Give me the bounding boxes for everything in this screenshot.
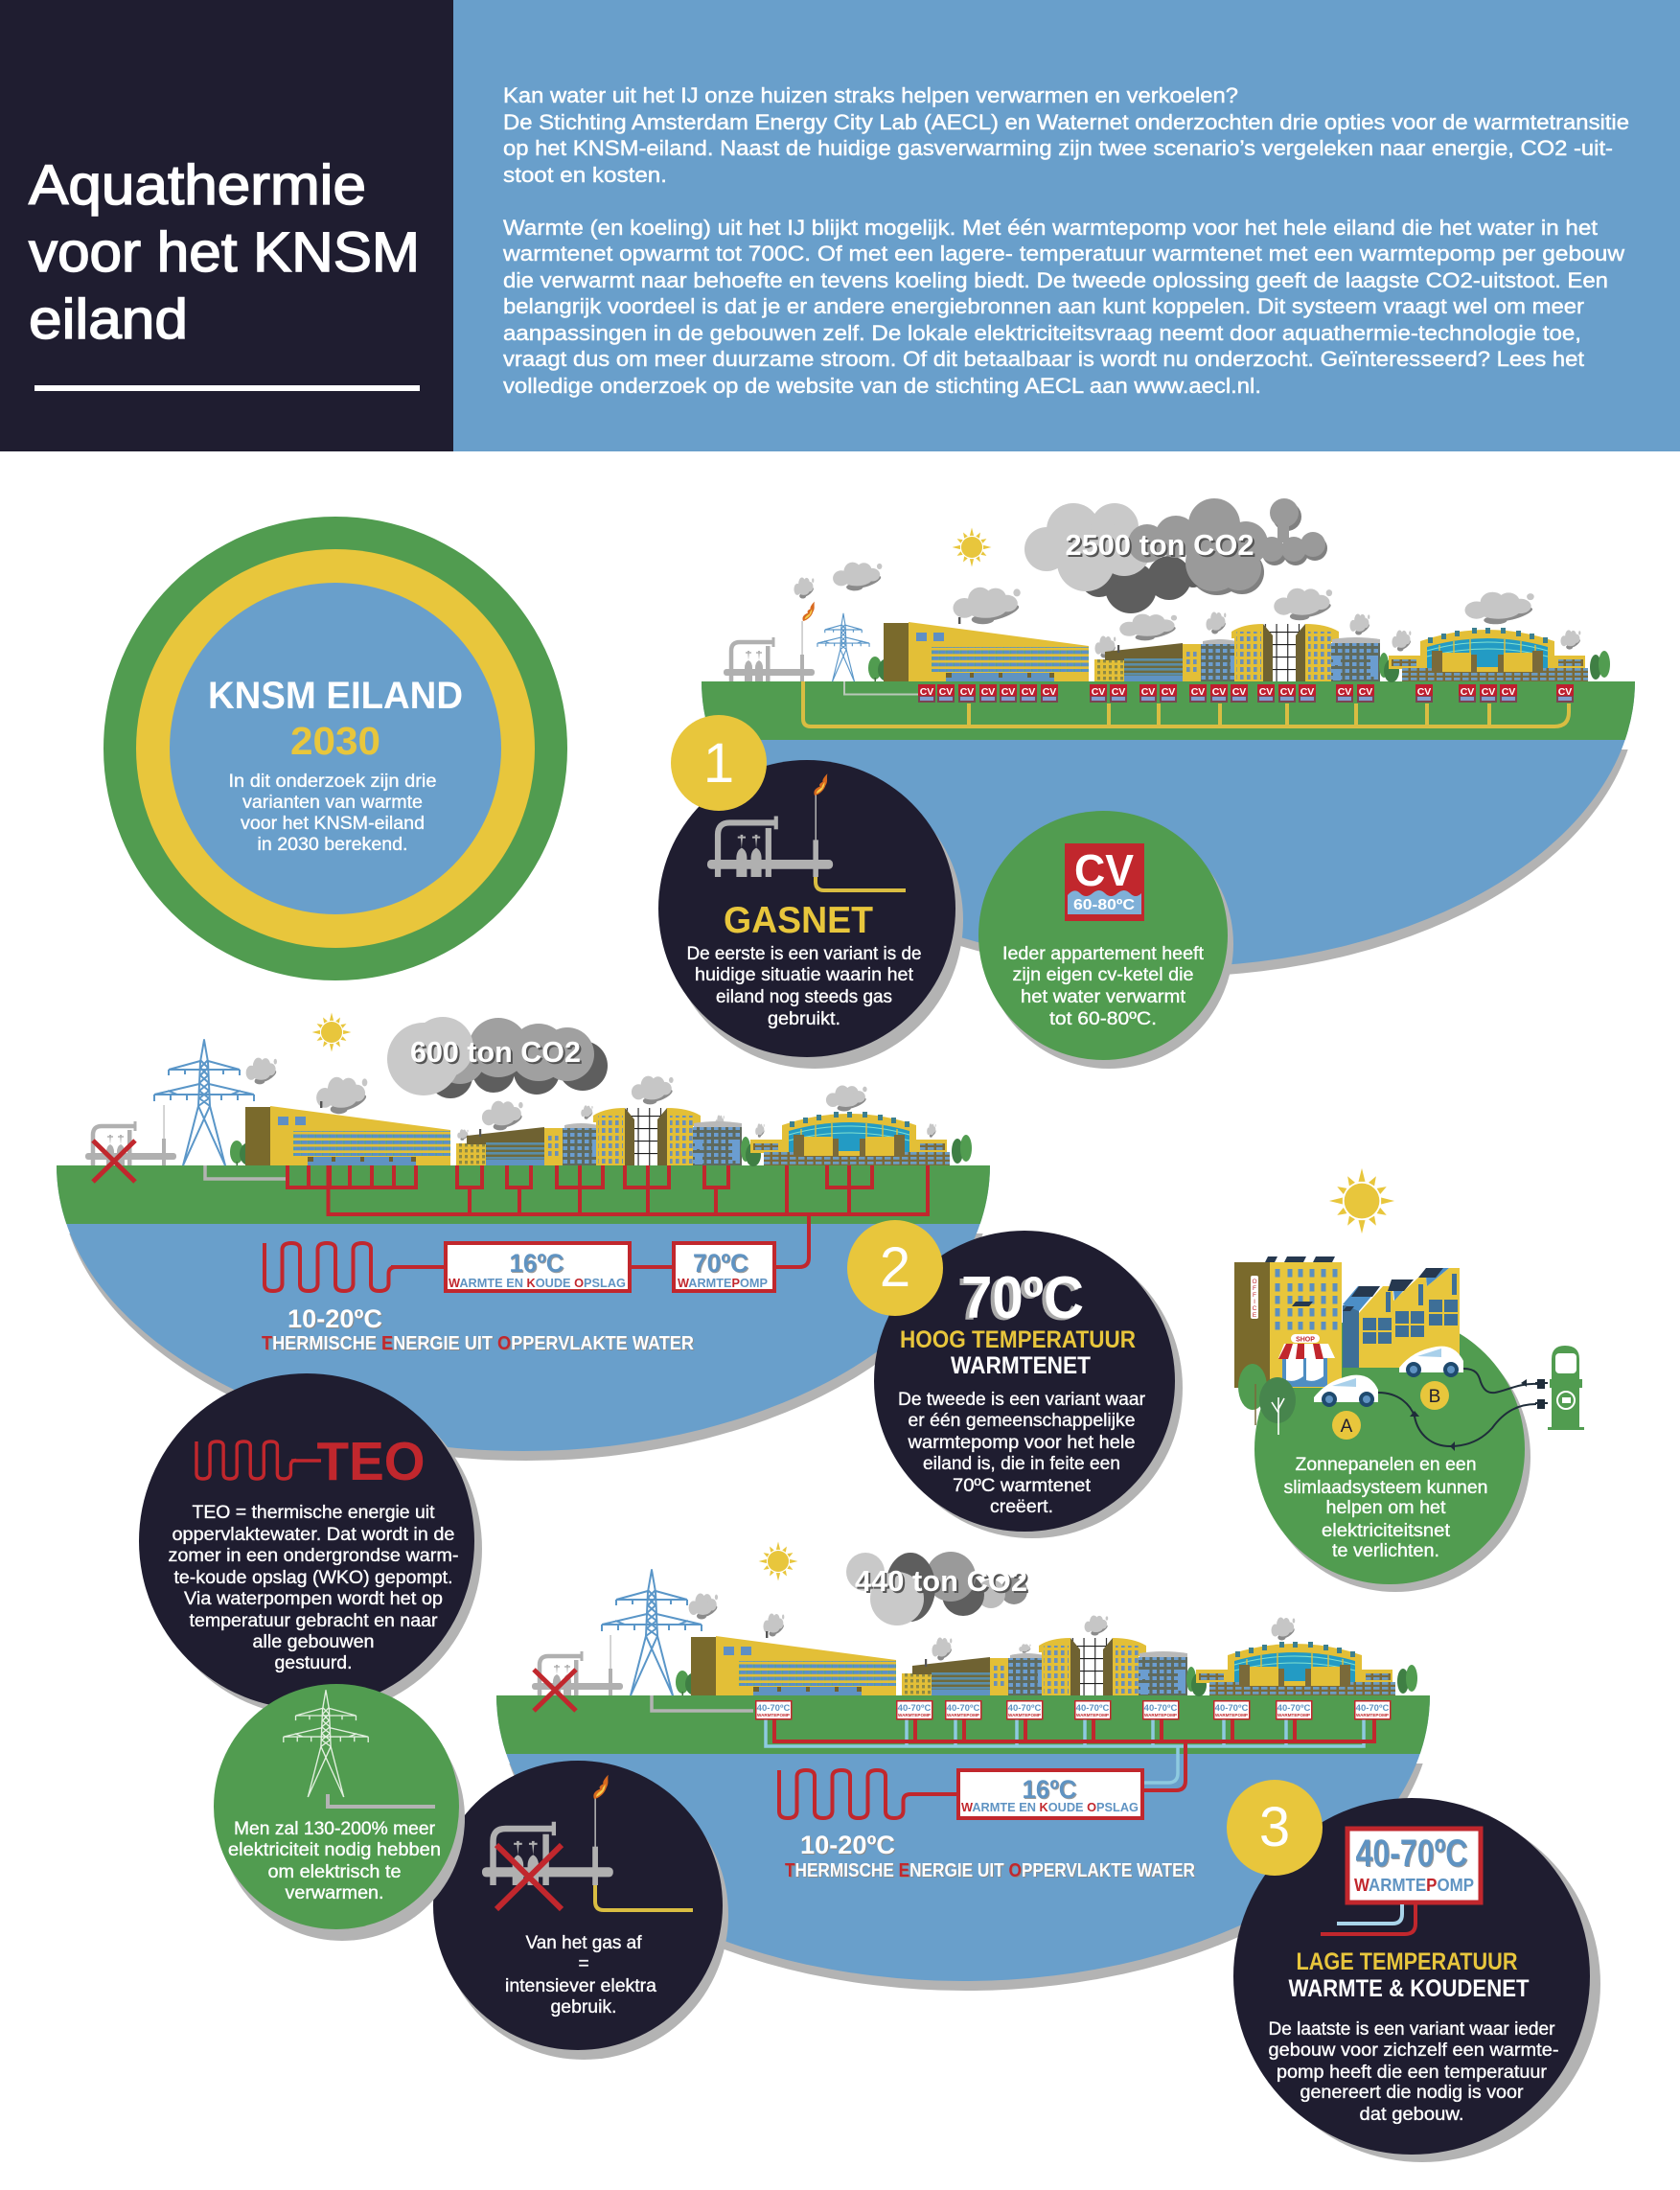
CV boilers: CV — [1001, 686, 1015, 698]
CV boilers — [918, 684, 1574, 703]
box: warmte en koude opslag — [446, 1243, 630, 1291]
label: thermal energy: THERMISCHE ENERGIE UIT OPPERVLAKTE WATER — [785, 1860, 1195, 1881]
text block: eiland nog steeds gas — [716, 987, 892, 1007]
heading: Aquathermie — [29, 154, 366, 217]
CV boilers: CV — [1022, 686, 1035, 698]
text block: eiland is, die in feite een — [923, 1454, 1120, 1474]
icon: car A — [1314, 1375, 1378, 1407]
text block: gestuurd. — [274, 1653, 353, 1673]
box: warmtepomp: 40-70ºC — [1355, 1833, 1468, 1875]
text block: Via waterpompen wordt het op — [184, 1589, 443, 1609]
label: thermal energy: 10-20ºC — [800, 1831, 895, 1859]
CV boilers: CV — [1212, 686, 1226, 698]
heading: TEO with coil: TEO — [316, 1431, 426, 1492]
scenario 3: island with low temperature network — [496, 1542, 1433, 1991]
label: thermal energy: 10-20ºC — [288, 1304, 382, 1333]
text block: gebruikt. — [768, 1009, 840, 1029]
heat pump badges: WARMTEPOMP — [898, 1713, 931, 1717]
icon: CV boiler: CV — [1074, 845, 1134, 895]
box: warmtepomp: WARMTEPOMP — [1354, 1876, 1474, 1895]
text block: = — [578, 1954, 589, 1974]
icon: gas plant — [707, 773, 906, 890]
trees — [1238, 1364, 1296, 1435]
panel: KNSM eiland 2030 circle: in 2030 berekend. — [257, 835, 408, 855]
CV boilers: CV — [1558, 686, 1572, 698]
text block: slimlaadsysteem kunnen — [1284, 1478, 1487, 1498]
panel: introduction — [453, 0, 1680, 451]
text block: intro paragraph 1: stoot en kosten. — [503, 163, 667, 187]
text block: intro paragraph 2: vraagt dus om meer duurzame stroom. Of dit betaalbaar is wordt nu onderzocht. Geïnteresseerd? Lees het — [503, 347, 1584, 371]
label: thermal energy: THERMISCHE ENERGIE UIT OPPERVLAKTE WATER — [262, 1333, 695, 1354]
heat pump badges: 40-70ºC — [1008, 1703, 1041, 1714]
CV boilers: CV — [1162, 686, 1175, 698]
text block: creëert. — [990, 1497, 1053, 1517]
cloud: 600 ton CO2 — [387, 1017, 608, 1098]
panel: KNSM eiland 2030 circle: varianten van warmte — [242, 793, 423, 813]
office building: E — [1253, 1312, 1257, 1319]
text block: intro paragraph 2: aanpassingen in de gebouwen zelf. De lokale elektriciteitsvraag neemt door aquathermie-technologie toe, — [503, 321, 1581, 345]
office building: O — [1252, 1279, 1257, 1285]
heading: warmtenet: HOOG TEMPERATUUR — [900, 1326, 1136, 1353]
text block: verwarmen. — [286, 1883, 383, 1903]
text block: Men zal 130-200% meer — [234, 1819, 436, 1839]
CV boilers: CV — [1502, 686, 1515, 698]
icon: electricity pylon — [602, 1570, 702, 1695]
box: warmte en koude opslag: WARMTE EN KOUDE OPSLAG — [961, 1800, 1139, 1814]
heat pump badges — [756, 1701, 1391, 1719]
heading: warmtenet — [900, 1326, 1136, 1379]
heading: lage temperatuur: LAGE TEMPERATUUR — [1296, 1948, 1518, 1975]
CV boilers: CV — [1232, 686, 1246, 698]
text block: intro paragraph 2: Warmte (en koeling) uit het IJ blijkt mogelijk. Met één warmtepomp voor het hele eiland die het water in het — [503, 216, 1598, 240]
heat pump badges: 40-70ºC — [898, 1703, 931, 1714]
text block: De tweede is een variant waar — [898, 1390, 1146, 1410]
heat pump badges: 40-70ºC — [1144, 1703, 1177, 1714]
heat pump badges: WARMTEPOMP — [1144, 1713, 1177, 1717]
heading: voor het KNSM — [29, 221, 420, 284]
panel: KNSM eiland 2030 circle: KNSM EILAND — [208, 675, 463, 717]
panel: KNSM eiland 2030 circle: In dit onderzoek zijn drie — [228, 772, 437, 792]
icon: sun — [759, 1542, 797, 1580]
box: warmtepomp: WARMTEPOMP — [678, 1276, 768, 1290]
text block: intro paragraph 1: Kan water uit het IJ onze huizen straks helpen verwarmen en verkoelen? — [503, 83, 1238, 107]
heat pump badges: WARMTEPOMP — [1008, 1713, 1041, 1717]
coil: surface water — [779, 1770, 910, 1818]
text block: het water verwarmt — [1021, 987, 1186, 1007]
badge: number 1 — [671, 715, 767, 811]
scenario 2: island with high temperature heat network — [57, 1013, 993, 1461]
charging cables — [1378, 1369, 1537, 1446]
callout: TEO — [139, 1373, 482, 1717]
box: warmte en koude opslag: 16ºC — [1022, 1775, 1077, 1804]
CV boilers: CV — [1417, 686, 1431, 698]
badge: number 2: 2 — [880, 1236, 910, 1299]
office building: F — [1253, 1292, 1256, 1299]
CV boilers: CV — [1191, 686, 1205, 698]
office building — [1234, 1256, 1342, 1388]
badge: B — [1420, 1381, 1449, 1410]
office building: C — [1253, 1305, 1257, 1312]
box: warmtepomp — [674, 1243, 774, 1291]
icon: electricity pylon — [154, 1040, 254, 1165]
text block — [1284, 1455, 1487, 1561]
text block: te-koude opslag (WKO) gepompt. — [174, 1568, 452, 1588]
text block: elektriciteitsnet — [1322, 1521, 1451, 1541]
CV boilers: CV — [981, 686, 995, 698]
icon: car B — [1399, 1347, 1463, 1377]
text block: Van het gas af — [525, 1933, 642, 1953]
heading: warmtenet: WARMTENET — [951, 1352, 1091, 1379]
CV boilers: CV — [1338, 686, 1351, 698]
heat pump badges: 40-70ºC — [1215, 1703, 1248, 1714]
text block — [505, 1933, 656, 2017]
text block: intro paragraph 2 — [502, 216, 1624, 398]
CV boilers: CV — [1461, 686, 1474, 698]
text block: Zonnepanelen en een — [1296, 1455, 1476, 1475]
buildings — [230, 1101, 972, 1166]
panel: solar panels and smart charging — [1234, 1168, 1584, 1592]
CV boilers: CV — [1359, 686, 1372, 698]
heading: lage temperatuur: WARMTE & KOUDENET — [1288, 1975, 1530, 2002]
text block: zijn eigen cv-ketel die — [1012, 965, 1194, 985]
callout: van het gas af — [433, 1761, 728, 2060]
text block — [1269, 2019, 1558, 2125]
icon: CV boiler: 60-80ºC — [1073, 897, 1135, 913]
smoke clouds — [689, 1594, 1295, 1660]
heat network pipes — [288, 1165, 928, 1267]
scenario 1: island with gas network — [702, 498, 1638, 977]
text block: helpen om het — [1326, 1498, 1446, 1518]
buildings — [676, 1631, 1417, 1696]
text block — [169, 1503, 458, 1673]
badge: A: A — [1341, 1417, 1353, 1437]
text block: intro paragraph 2: volledige onderzoek op de website van de stichting AECL aan www.aecl.nl. — [503, 374, 1261, 398]
panel: title — [0, 0, 453, 451]
badge: number 3 — [1227, 1780, 1323, 1876]
badge: number 3: 3 — [1259, 1796, 1290, 1858]
box: warmtepomp: 70ºC — [693, 1249, 748, 1278]
text block: 70ºC warmtenet — [953, 1476, 1092, 1496]
badge: B: B — [1429, 1387, 1440, 1407]
pipes — [1321, 1904, 1415, 1934]
scenario 2 callout: hoog temperatuur warmtenet — [874, 1231, 1183, 1538]
text block: pomp heeft die een temperatuur — [1277, 2063, 1548, 2083]
text block: intensiever elektra — [505, 1976, 656, 1996]
CV boilers: CV — [1141, 686, 1155, 698]
text block: intro paragraph 2: warmtenet opwarmt tot 700C. Of met een lagere- temperatuur warmtenet met een warmtepomp per gebouw — [502, 242, 1624, 265]
disconnected gas plant — [532, 1635, 623, 1711]
heat pump badges: 40-70ºC — [757, 1703, 790, 1714]
text block: tot 60-80ºC. — [1049, 1009, 1157, 1029]
buildings — [868, 617, 1610, 682]
disconnected gas plant — [85, 1105, 176, 1182]
icon: sun — [953, 528, 991, 566]
callout: meer elektriciteit — [214, 1684, 465, 1941]
panel: KNSM eiland 2030 circle: voor het KNSM-eiland — [241, 814, 425, 834]
heat pump badges: 40-70ºC — [1076, 1703, 1109, 1714]
heat pump badges: WARMTEPOMP — [1076, 1713, 1109, 1717]
cloud: 440 ton CO2: 440 ton CO2 — [855, 1564, 1027, 1598]
heading: TEO with coil — [196, 1431, 426, 1492]
heat pump badges: WARMTEPOMP — [757, 1713, 790, 1717]
text block: intro paragraph 1 — [503, 83, 1629, 187]
CV boilers: CV — [1112, 686, 1125, 698]
badge: number 2 — [847, 1220, 943, 1316]
CV boilers: CV — [1280, 686, 1294, 698]
cloud: 600 ton CO2: 600 ton CO2 — [410, 1035, 581, 1069]
smoke clouds — [246, 1058, 936, 1141]
CV boilers: CV — [960, 686, 974, 698]
heat pump badges: 40-70ºC — [1356, 1703, 1389, 1714]
heat pump badges: WARMTEPOMP — [947, 1713, 979, 1717]
scenario 1 callout: gasnet — [658, 760, 963, 1069]
label: thermal energy — [785, 1831, 1195, 1881]
icon: electricity pylon — [817, 613, 869, 681]
badge: number 1: 1 — [703, 732, 734, 795]
CV boilers: CV — [1092, 686, 1105, 698]
scenario 3 callout: lage temperatuur — [1233, 1798, 1600, 2162]
heading — [29, 154, 420, 351]
text block: De eerste is een variant is de — [686, 944, 922, 964]
heat pump badges: 40-70ºC — [1277, 1703, 1310, 1714]
text block: om elektrisch te — [268, 1862, 401, 1882]
scenario 1 callout: CV boiler — [978, 811, 1233, 1069]
CV boilers: CV — [920, 686, 933, 698]
heading: eiland — [29, 288, 188, 351]
gas pipes — [803, 681, 1569, 726]
text block: zomer in een ondergrondse warm- — [169, 1546, 458, 1566]
text block: oppervlaktewater. Dat wordt in de — [173, 1525, 454, 1545]
text block: intro paragraph 1: De Stichting Amsterdam Energy City Lab (AECL) en Waternet onderzochten drie opties voor de warmtetransitie — [503, 110, 1629, 134]
text block: dat gebouw. — [1359, 2105, 1464, 2125]
text block — [228, 1819, 441, 1903]
icon: shop: SHOP — [1296, 1336, 1315, 1344]
heading: lage temperatuur — [1288, 1948, 1530, 2002]
text block — [898, 1390, 1146, 1517]
heading: GASNET: GASNET — [724, 900, 873, 941]
text block: De laatste is een variant waar ieder — [1269, 2019, 1555, 2040]
gas plant — [724, 602, 815, 681]
office building: I — [1254, 1299, 1255, 1305]
heat pump badges: WARMTEPOMP — [1277, 1713, 1310, 1717]
coil: surface water — [265, 1243, 396, 1291]
icon: CV boiler — [1065, 843, 1144, 921]
CV boilers: CV — [939, 686, 953, 698]
smoke clouds — [794, 563, 1580, 658]
heat pump badges: WARMTEPOMP — [1356, 1713, 1389, 1717]
text block — [686, 944, 922, 1029]
icon: pylon — [284, 1691, 368, 1797]
text block: genereert die nodig is voor — [1300, 2083, 1524, 2103]
icon: shop — [1278, 1334, 1335, 1387]
houses with solar panels — [1343, 1268, 1460, 1368]
heading: 70ºC: 70ºC — [961, 1265, 1084, 1331]
box: warmte en koude opslag — [958, 1770, 1142, 1818]
text block: TEO = thermische energie uit — [192, 1503, 435, 1523]
text block: gebouw voor zichzelf een warmte- — [1269, 2040, 1558, 2061]
low temperature pipes — [766, 1719, 1374, 1794]
text block: te verlichten. — [1332, 1541, 1439, 1561]
box: warmte en koude opslag: 16ºC — [510, 1249, 564, 1278]
CV boilers: CV — [1043, 686, 1056, 698]
text block — [1002, 944, 1205, 1029]
cloud: 2500 ton CO2: 2500 ton CO2 — [1066, 528, 1254, 562]
text block: gebruik. — [550, 1997, 617, 2017]
text block: intro paragraph 2: belangrijk voordeel is dat je er andere energiebronnen aan kunt koppelen. Dit systeem vraagt wel om meer — [503, 294, 1584, 318]
text block: huidige situatie waarin het — [695, 965, 914, 985]
icon: gas plant crossed out — [482, 1775, 693, 1910]
text block: er één gemeenschappelijke — [909, 1411, 1135, 1431]
icon: sun — [312, 1013, 351, 1051]
cloud: 2500 ton CO2 — [1024, 498, 1327, 613]
text block: alle gebouwen — [253, 1632, 374, 1652]
text block: Ieder appartement heeft — [1002, 944, 1205, 964]
heat pump badges: 40-70ºC — [947, 1703, 979, 1714]
office building: F — [1253, 1285, 1256, 1292]
text block: temperatuur gebracht en naar — [190, 1611, 438, 1631]
arrows on cables — [1410, 1379, 1527, 1451]
CV boilers: CV — [1482, 686, 1495, 698]
text block: intro paragraph 1: op het KNSM-eiland. Naast de huidige gasverwarming zijn twee scenario’s vergeleken naar energie, CO2 -uit- — [503, 136, 1613, 160]
box: warmtepomp — [1347, 1829, 1481, 1902]
panel: KNSM eiland 2030 circle: 2030 — [290, 719, 380, 763]
CV boilers: CV — [1300, 686, 1314, 698]
panel: KNSM eiland 2030 circle — [104, 517, 567, 980]
CV boilers: CV — [1259, 686, 1273, 698]
text block: intro paragraph 2: die verwarmt naar behoefte en tevens koeling biedt. De tweede oplossing geeft de laagste CO2-uitstoot. Een — [503, 268, 1608, 292]
label: thermal energy — [262, 1304, 695, 1354]
text block: elektriciteit nodig hebben — [228, 1840, 441, 1860]
badge: A — [1332, 1411, 1361, 1440]
box: warmte en koude opslag: WARMTE EN KOUDE OPSLAG — [449, 1276, 626, 1290]
text block: warmtepomp voor het hele — [907, 1433, 1135, 1453]
icon: charging station — [1535, 1346, 1584, 1430]
heat pump badges: WARMTEPOMP — [1215, 1713, 1248, 1717]
cloud: 440 ton CO2 — [846, 1552, 1027, 1625]
icon: big sun — [1329, 1168, 1394, 1233]
